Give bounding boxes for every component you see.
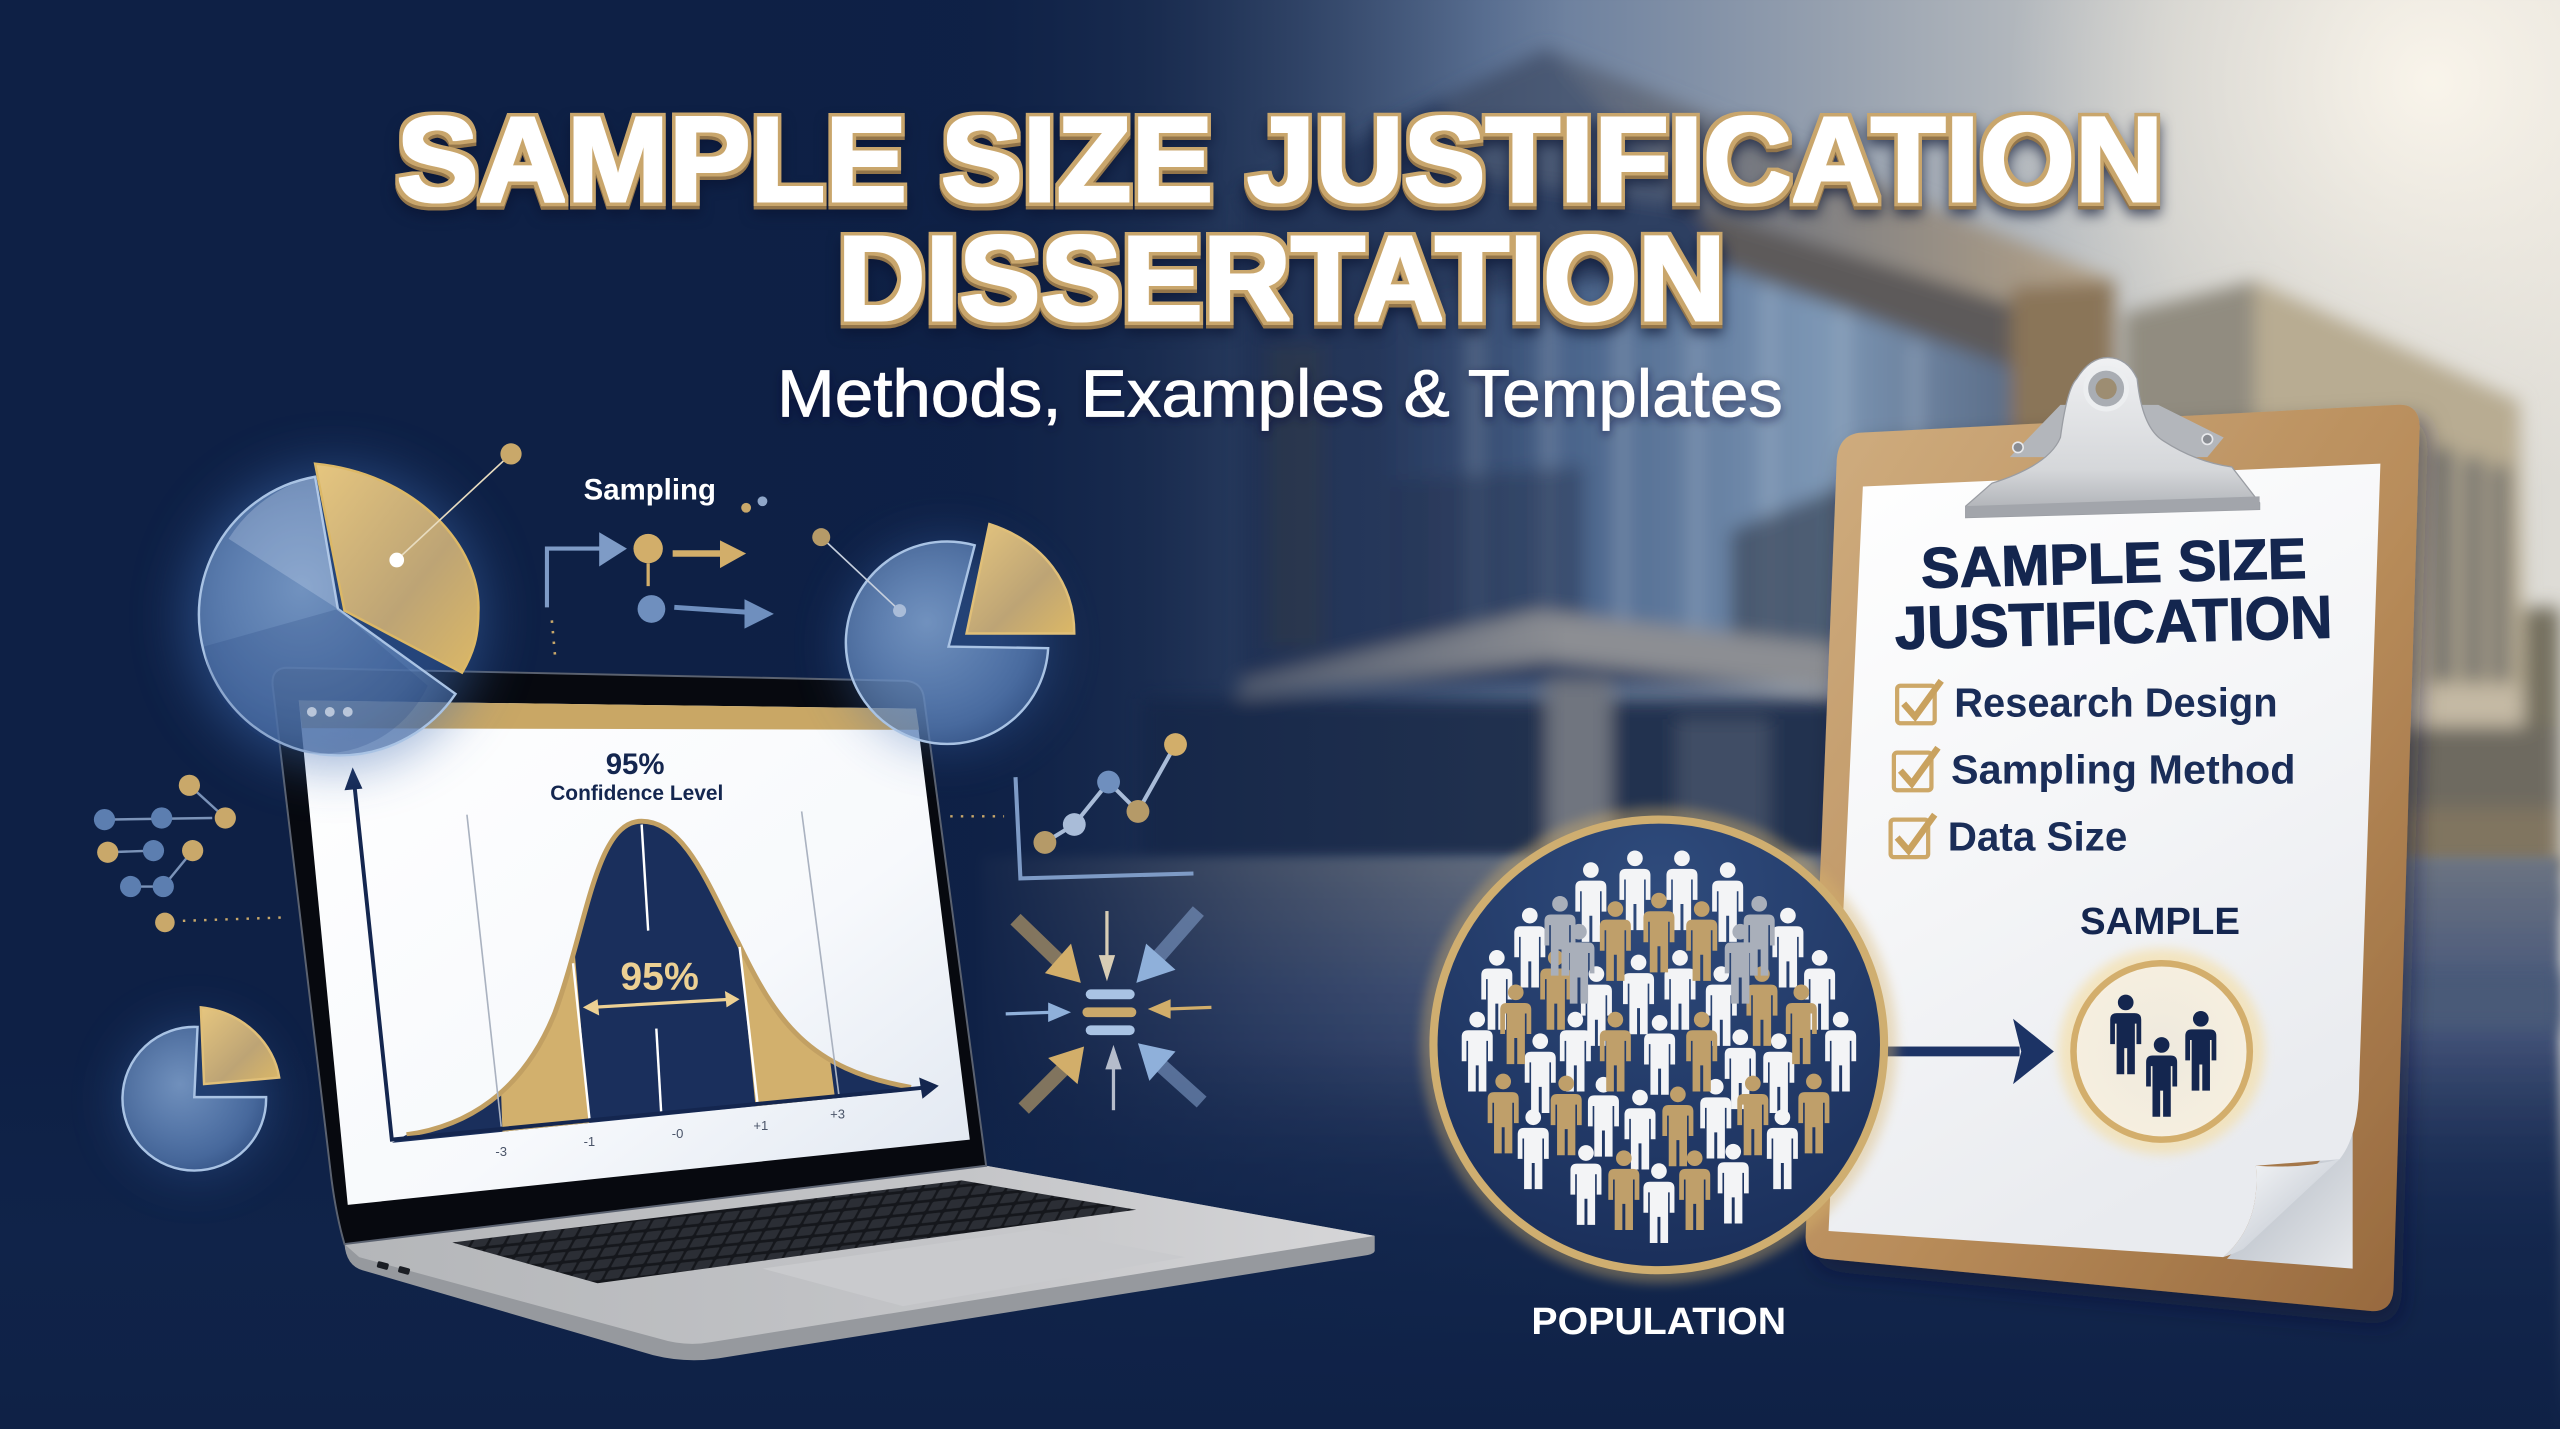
axes — [354, 784, 927, 1140]
tick labels: -3 — [495, 1144, 507, 1159]
item: data size: Data Size — [1948, 814, 2127, 860]
pie chart: right — [812, 524, 1074, 746]
chart subheading: Confidence Level — [550, 782, 723, 805]
laptop — [273, 668, 1375, 1360]
pie chart: small — [122, 1007, 279, 1172]
tick labels: -0 — [672, 1126, 683, 1141]
arrow: population to sample — [1886, 1019, 2054, 1084]
clipboard board — [1806, 405, 2420, 1311]
sample circle — [2059, 949, 2264, 1154]
clipboard heading: SAMPLE SIZE — [1920, 527, 2307, 601]
title: SAMPLE SIZE JUSTIFICATION — [397, 92, 2163, 227]
95% label: 95% — [620, 955, 699, 998]
white figures — [1462, 850, 1856, 1243]
gold figures — [1488, 893, 1829, 1230]
laptop base — [344, 1166, 1375, 1360]
clipboard heading: JUSTIFICATION — [1894, 583, 2333, 662]
sampling label: Sampling — [584, 474, 716, 507]
curve fill sections — [392, 824, 906, 1143]
tick labels: -1 — [584, 1134, 595, 1149]
chart heading: 95% — [606, 748, 665, 781]
keyboard — [452, 1180, 1136, 1283]
population label: POPULATION — [1531, 1300, 1786, 1342]
guide lines — [467, 811, 839, 1127]
window dots — [307, 707, 353, 717]
title: DISSERTATION — [838, 211, 1726, 346]
checklist — [1891, 680, 2296, 860]
title — [397, 92, 2163, 346]
laptop deck — [344, 1166, 1375, 1344]
tick labels: +3 — [830, 1106, 845, 1121]
double arrow — [583, 991, 740, 1016]
clipboard heading — [1892, 526, 2333, 662]
population circle — [1420, 807, 1897, 1283]
screen — [299, 700, 970, 1205]
paper sheet — [1829, 464, 2380, 1257]
sampling flow diagram — [547, 496, 774, 656]
line chart icon — [950, 733, 1193, 878]
pie chart: large — [184, 443, 522, 767]
clip — [1966, 358, 2260, 518]
tick labels: +1 — [753, 1118, 768, 1133]
paper curl — [2223, 1159, 2340, 1257]
item: sampling method: Sampling Method — [1951, 747, 2296, 793]
network nodes — [94, 775, 281, 932]
sample label: SAMPLE — [2080, 900, 2240, 942]
converging arrows — [1006, 911, 1211, 1110]
window header bar — [299, 700, 919, 730]
gray figures — [1544, 896, 1775, 1004]
curve outline — [407, 821, 911, 1135]
item: research design: Research Design — [1954, 680, 2278, 726]
laptop lid — [273, 668, 986, 1244]
subtitle: Methods, Examples & Templates — [777, 356, 1783, 431]
under sheet — [2227, 1127, 2353, 1269]
ports — [376, 1261, 410, 1275]
clipboard — [1806, 358, 2420, 1311]
bell curve chart — [344, 748, 939, 1159]
trackpad — [762, 1229, 1185, 1306]
tick labels — [495, 1106, 845, 1159]
